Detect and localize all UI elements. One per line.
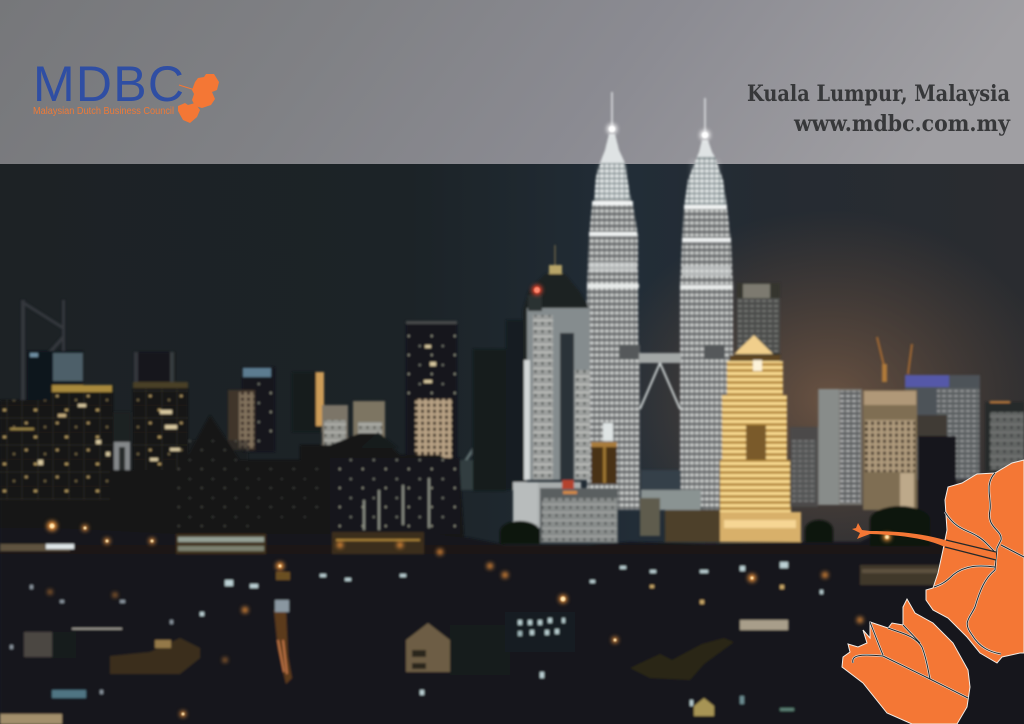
Petronas Twin Tower right (680, 98, 733, 510)
MDBC logo (33, 56, 219, 123)
dark mid-ground block of buildings (0, 415, 464, 540)
logo wordmark: MDBC (33, 56, 184, 112)
stamen (852, 523, 996, 560)
golden tower (720, 283, 801, 542)
tulip-shaped bud (842, 599, 970, 724)
houses and lit low-rise buildings (0, 612, 788, 724)
skybridge (639, 353, 681, 409)
hibiscus flower decoration (842, 460, 1024, 724)
lit area at tower base (640, 470, 720, 542)
central tower with red beacon (513, 245, 618, 543)
podium arcades with lit windows (0, 532, 424, 554)
large open bloom (926, 460, 1024, 663)
foreground ground of low-rise city (0, 506, 1024, 724)
logo flower icon (178, 74, 219, 123)
logo tagline: Malaysian Dutch Business Council (33, 106, 174, 117)
left skyline buildings (0, 300, 527, 530)
Petronas Twin Tower left (587, 92, 640, 510)
street lamp glows (47, 124, 891, 717)
translucent grey header band (0, 0, 1024, 164)
right side buildings (790, 337, 1024, 516)
scattered window lights (10, 345, 823, 711)
location and website text (747, 81, 1011, 137)
road with light trails (274, 572, 292, 684)
